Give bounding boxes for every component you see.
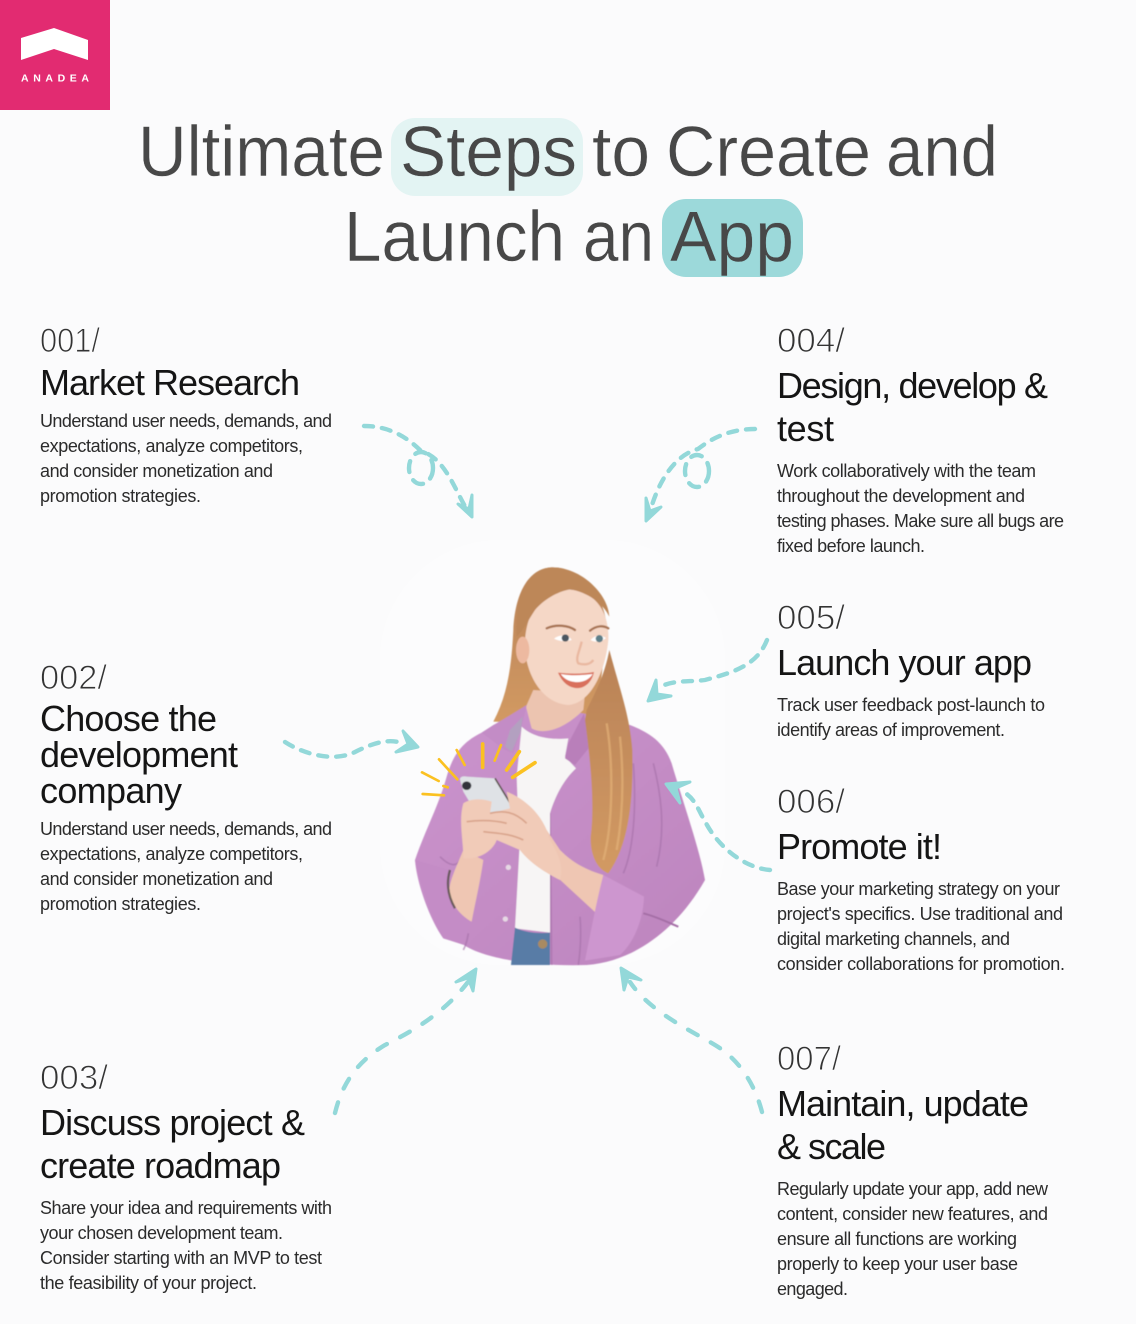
step description: project's specifics. Use traditional and [777,904,1063,924]
step description: consider collaborations for promotion. [777,954,1065,974]
step heading [777,1083,1029,1167]
left forearm [449,850,483,922]
step description: Share your idea and requirements with [40,1198,332,1218]
hair back [493,567,607,723]
t-shirt [515,727,576,933]
title: App [670,198,794,277]
step description: and consider monetization and [40,461,273,481]
title: Launch [344,198,565,277]
step description: your chosen development team. [40,1223,283,1243]
arrow: step 4 to centre [646,429,755,521]
step heading: test [777,408,834,449]
step description: fixed before launch. [777,536,925,556]
jeans [511,928,550,965]
step description: and consider monetization and [40,869,273,889]
title [138,113,998,277]
step description [40,819,332,914]
buttons [506,865,511,870]
step heading: create roadmap [40,1145,281,1186]
step 005 [777,599,1045,740]
step description: expectations, analyze competitors, [40,436,303,456]
title: an [583,198,654,277]
step heading: Maintain, update [777,1083,1029,1124]
title: Create [666,113,871,192]
step description [777,461,1064,556]
step heading: Market Research [40,362,300,403]
title: Steps [400,113,577,192]
title: and [886,113,998,192]
step number: 006/ [777,783,846,821]
step heading: Design, develop & [777,365,1048,406]
step number: 003/ [40,1059,109,1097]
step description: the feasibility of your project. [40,1273,257,1293]
hair top [517,567,609,637]
arrow: step 7 to centre [621,968,762,1112]
step description: properly to keep your user base [777,1254,1018,1274]
nose and mouth [577,642,593,664]
step description: Work collaboratively with the team [777,461,1036,481]
step description: Understand user needs, demands, and [40,411,332,431]
logo: Anadea: ANADEA [21,72,89,84]
step heading: Launch your app [777,642,1032,683]
shirt [415,706,705,965]
hands [461,792,561,880]
step description: content, consider new features, and [777,1204,1048,1224]
step number: 004/ [777,322,846,360]
step description: digital marketing channels, and [777,929,1010,949]
step heading: Choose the [40,698,217,739]
step description [40,411,332,506]
step heading [40,698,238,811]
step 006 [777,783,1065,974]
left collar and neck [526,690,585,731]
step 007 [777,1040,1049,1299]
step 001 [40,322,332,506]
step description [777,695,1045,740]
arrow: step 3 to centre [335,969,476,1113]
arrow: step 6 to centre [666,782,770,870]
phone [460,776,513,817]
step description: expectations, analyze competitors, [40,844,303,864]
long hair front [585,650,632,873]
title: to [592,113,650,192]
step 004 [777,322,1064,556]
right forearm and cuff [527,830,603,917]
step description: Consider starting with an MVP to test [40,1248,322,1268]
step description: Base your marketing strategy on your [777,879,1060,899]
arrow: step 5 to centre [648,640,767,701]
step number: 005/ [777,599,846,637]
step description [40,1198,332,1293]
step description: ensure all functions are working [777,1229,1017,1249]
illustration: woman holding phone [380,540,725,965]
step 003 [40,1059,332,1293]
face [525,589,608,705]
step description [777,1179,1049,1299]
step description: testing phases. Make sure all bugs are [777,511,1064,531]
step number: 001/ [40,322,100,360]
step description: throughout the development and [777,486,1025,506]
step heading [40,1102,305,1186]
step description: promotion strategies. [40,486,201,506]
step description: promotion strategies. [40,894,201,914]
step description: Track user feedback post-launch to [777,695,1045,715]
eyes and brows [547,626,608,631]
step heading: company [40,770,182,811]
logo: Anadea [0,0,110,110]
step description: identify areas of improvement. [777,720,1005,740]
step number: 002/ [40,659,108,697]
step heading: development [40,734,238,775]
step heading: Promote it! [777,826,942,867]
step description: Regularly update your app, add new [777,1179,1049,1199]
step heading: Discuss project & [40,1102,305,1143]
step description: engaged. [777,1279,848,1299]
yellow rays [422,744,535,795]
shirt folds [440,763,662,965]
title: Ultimate [138,113,385,192]
step description: Understand user needs, demands, and [40,819,332,839]
step 002 [40,659,332,914]
step description [777,879,1065,974]
step number: 007/ [777,1040,842,1078]
arrow: step 1 to centre [364,426,472,517]
step heading: & scale [777,1126,886,1167]
step heading [777,365,1048,449]
arrow: step 2 to centre [285,731,418,757]
